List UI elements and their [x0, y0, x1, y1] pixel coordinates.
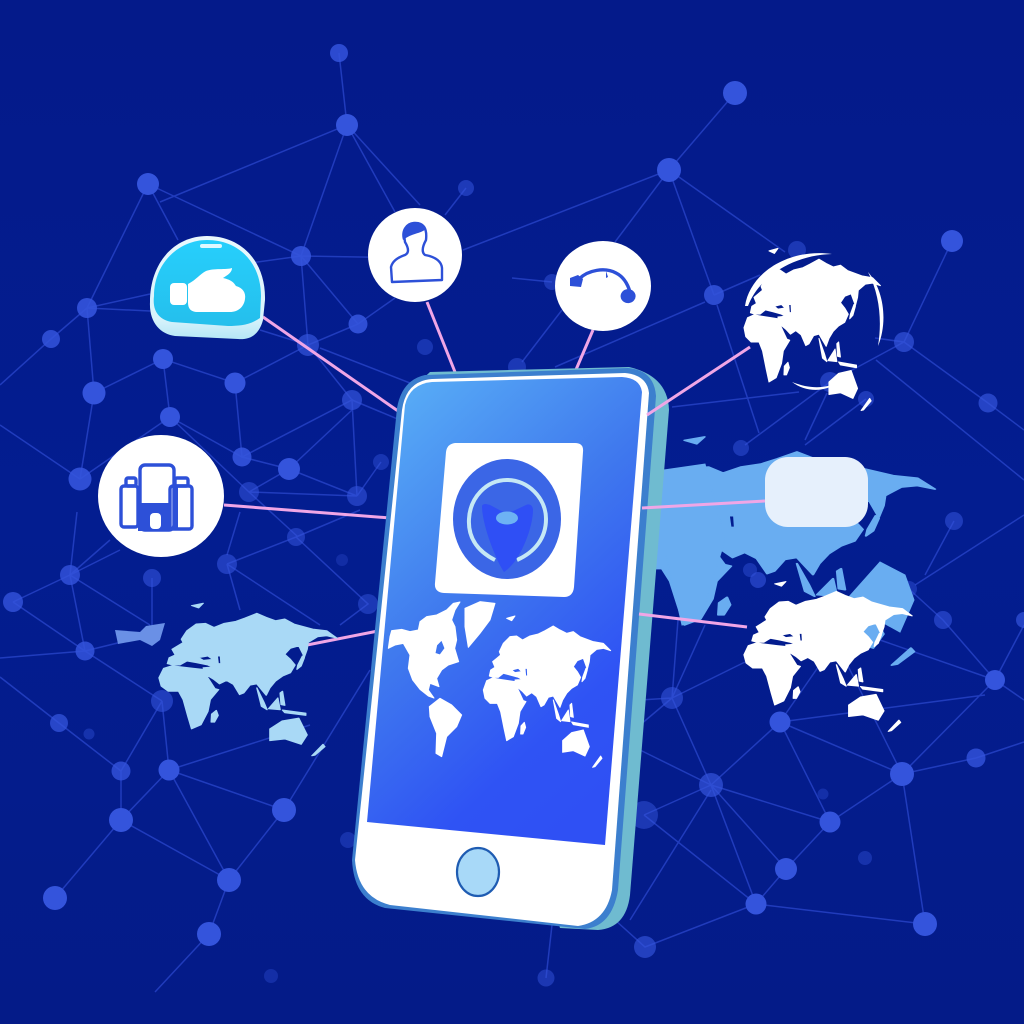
phone	[352, 367, 669, 930]
white rounded label box on map	[765, 457, 868, 527]
icon circle: phone handset arc	[555, 241, 651, 331]
app icon	[435, 443, 583, 597]
globe: top right	[744, 248, 883, 411]
phone screen	[367, 377, 642, 845]
icon circle: apps	[98, 435, 224, 557]
map: right white world map	[744, 582, 912, 731]
icon circle: user	[368, 208, 462, 302]
map: large pale blue world map behind phone	[628, 437, 935, 665]
screen world map	[388, 602, 611, 767]
connector lines: right side over phone edge	[639, 347, 765, 627]
phone frame	[352, 368, 656, 929]
connector lines: left and top	[224, 302, 593, 646]
home button	[457, 848, 499, 896]
badge glyph: thumb	[170, 268, 245, 312]
phone side	[400, 367, 669, 930]
map: left pale world map	[115, 603, 337, 756]
phone bezel	[355, 373, 649, 926]
badge: thumb icon	[150, 236, 265, 339]
